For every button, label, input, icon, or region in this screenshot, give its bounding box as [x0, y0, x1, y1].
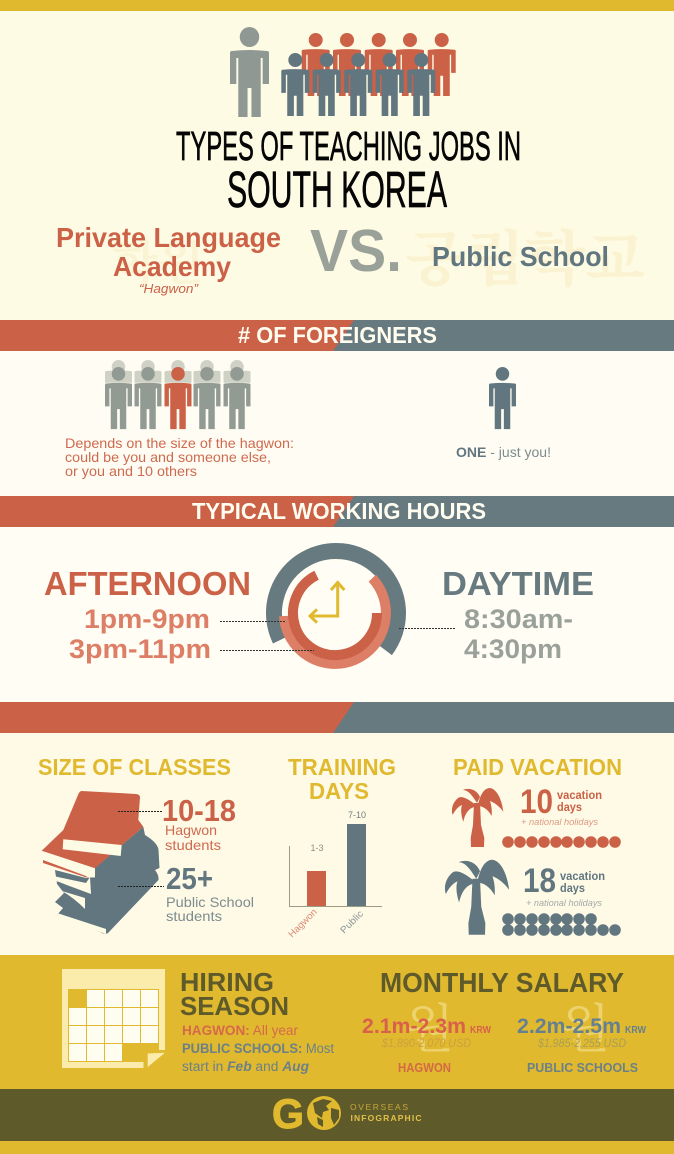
stat: hagwon students: Hagwon	[165, 822, 217, 838]
text: hiring details: PUBLIC SCHOOLS: Most	[182, 1041, 334, 1056]
text: one just you: ONE - just you!	[456, 444, 551, 460]
icon: single teacher	[489, 367, 516, 429]
stat: hagwon vacation days: + national holidays	[521, 817, 599, 827]
title: SOUTH KOREA	[227, 161, 447, 218]
icon: stack of books	[42, 791, 160, 934]
stat: public school salary: PUBLIC SCHOOLS	[527, 1060, 638, 1075]
panel: daytime hours: 4:30pm	[464, 634, 562, 664]
versus heading	[56, 218, 645, 296]
watermark: won symbols: 원	[404, 1001, 454, 1059]
stat: public school students: students	[166, 908, 222, 924]
panel: afternoon hours: 1pm-9pm	[84, 604, 210, 634]
icon: red palm tree	[452, 788, 503, 847]
stat: hagwon vacation days: vacation	[557, 788, 602, 802]
text: depends on size	[65, 435, 294, 479]
bar chart: Public	[338, 908, 366, 936]
arc: public school daytime	[274, 551, 398, 650]
logo text	[350, 1102, 422, 1123]
bar chart: 7-10	[348, 810, 366, 820]
stat: public school students: 25+	[166, 861, 213, 896]
panel: afternoon hours: AFTERNOON	[44, 565, 251, 602]
panel: foreigners hagwon	[65, 360, 294, 479]
stat: hagwon salary: $1,890-2,070 USD	[381, 1038, 471, 1050]
watermark: won symbols	[404, 1001, 610, 1059]
bar chart	[286, 810, 382, 940]
heading: SIZE OF CLASSES	[38, 754, 231, 780]
bar chart: 1-3	[310, 843, 324, 853]
icon: teacher and students	[230, 27, 456, 117]
footer band	[0, 1089, 674, 1141]
text: depends on size: or you and 10 others	[65, 463, 197, 479]
stat: public school students: Public School	[166, 894, 254, 910]
stat: public school salary: KRW	[625, 1025, 646, 1036]
arc: hagwon early shift	[293, 575, 377, 655]
stat: hagwon students: 10-18	[162, 793, 236, 828]
text: depends on size: Depends on the size of the hagwon:	[65, 435, 294, 451]
dots: ten red days	[502, 836, 621, 848]
stat: hagwon salary	[362, 1015, 491, 1075]
band: number of foreigners: # OF FOREIGNERS	[238, 322, 437, 348]
private language academy label: “Hagwon”	[139, 281, 199, 296]
heading: DAYS	[309, 778, 369, 804]
panel: gold footer background	[0, 955, 674, 1154]
logo text: INFOGRAPHIC	[350, 1113, 422, 1123]
stat: public school vacation days: days	[560, 881, 585, 895]
panel: daytime hours: 8:30am-	[464, 604, 573, 634]
private language academy label: Academy	[113, 251, 231, 282]
stat: public school salary	[517, 1015, 646, 1075]
watermark: won symbols: 원	[560, 1001, 610, 1059]
stat: public school vacation days: 18	[523, 862, 556, 900]
panel: paid vacation	[445, 754, 622, 936]
panel: daytime hours	[442, 565, 594, 664]
icon: group of teachers	[105, 360, 250, 429]
arc: hagwon late shift	[284, 578, 386, 664]
icon: globe	[307, 1096, 341, 1130]
panel: daytime hours: DAYTIME	[442, 565, 594, 602]
public school label: Public School	[432, 241, 609, 272]
watermark: hagwon in Korean: 학원	[112, 238, 204, 289]
heading	[288, 754, 396, 804]
heading: SEASON	[180, 991, 289, 1021]
text: hiring details: HAGWON: All year	[182, 1023, 298, 1038]
stat: hagwon vacation days	[520, 783, 602, 827]
stat: hagwon students: students	[165, 837, 221, 853]
heading	[180, 967, 289, 1021]
stat: public school salary: $1,985-2,255 USD	[537, 1038, 626, 1050]
stat: public school students	[166, 861, 254, 924]
stat: public school vacation days	[523, 862, 605, 908]
stat: hagwon students	[162, 793, 236, 853]
panel: afternoon hours: 3pm-11pm	[69, 634, 211, 664]
panel: hiring season	[180, 967, 334, 1074]
heading: PAID VACATION	[453, 754, 622, 780]
heading: MONTHLY SALARY	[380, 967, 624, 998]
band: typical working hours	[0, 496, 674, 527]
icon: calendar	[62, 969, 165, 1068]
logo text: OVERSEAS	[350, 1102, 408, 1112]
title	[176, 123, 521, 218]
stat: public school salary: 2.2m-2.5m	[517, 1015, 621, 1038]
private language academy label: Private Language	[56, 222, 281, 253]
stat: public school vacation days: + national holidays	[526, 898, 602, 908]
leader lines	[220, 622, 456, 650]
text: hiring details	[182, 1023, 334, 1074]
stat: hagwon salary: HAGWON	[398, 1060, 451, 1075]
logo: go overseas infographic	[272, 1090, 422, 1137]
panel: training days	[286, 754, 396, 940]
private language academy label	[56, 222, 281, 296]
panel: afternoon hours	[44, 565, 251, 664]
heading: HIRING	[180, 967, 274, 997]
leader lines	[118, 812, 164, 886]
divider band	[0, 702, 674, 733]
watermark: public school in Korean: 공립학교	[405, 227, 645, 293]
top gold bar	[0, 0, 674, 11]
stat: hagwon salary: 2.1m-2.3m	[362, 1015, 466, 1038]
panel: monthly salary	[362, 967, 646, 1075]
text: depends on size: could be you and someone else,	[65, 449, 271, 465]
text: hiring details: start in Feb and Aug	[182, 1059, 310, 1074]
chart: clock with hour arcs	[220, 551, 456, 664]
vs label: VS.	[310, 218, 402, 284]
band: typical working hours: TYPICAL WORKING HOURS	[192, 498, 486, 524]
panel: size of classes	[38, 754, 254, 934]
stat: hagwon salary: KRW	[470, 1025, 491, 1036]
panel: foreigners public school	[456, 367, 551, 460]
heading: TRAINING	[288, 754, 396, 780]
bar chart: Hagwon	[286, 907, 320, 940]
icon: clock hands	[310, 582, 344, 623]
logo letter G: G	[272, 1090, 304, 1137]
icon: blue palm tree	[445, 860, 509, 935]
dots: eighteen blue days	[502, 913, 621, 936]
band: number of foreigners	[0, 320, 674, 351]
stat: public school vacation days: vacation	[560, 869, 605, 883]
stat: hagwon vacation days: days	[557, 800, 582, 814]
stat: hagwon vacation days: 10	[520, 783, 553, 821]
